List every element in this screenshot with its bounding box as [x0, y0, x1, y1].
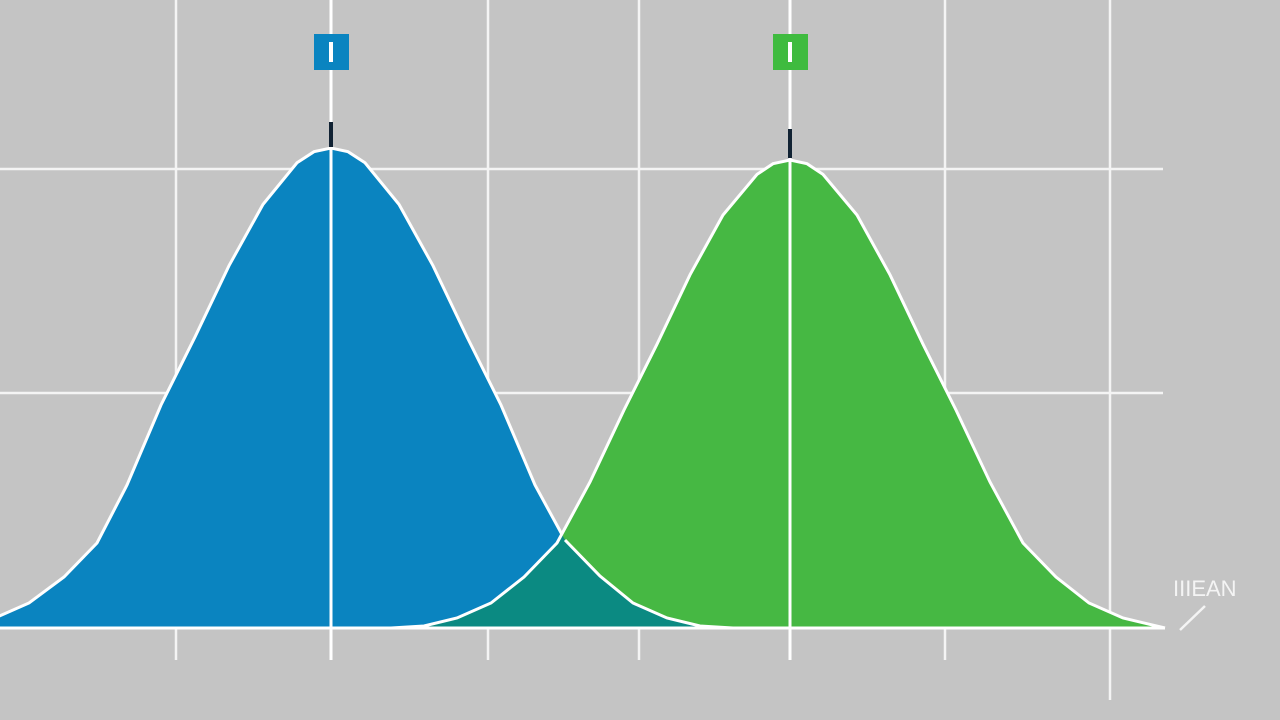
label marker: green [773, 34, 808, 70]
green distribution curve [391, 160, 1165, 628]
mean label: IIIEAN [1173, 576, 1237, 601]
blue distribution curve [0, 148, 733, 628]
mean lines [331, 0, 790, 660]
baseline [0, 626, 1165, 630]
mean label [1173, 576, 1237, 630]
label marker: blue [314, 34, 349, 70]
overlap region [428, 536, 696, 626]
peak ticks [331, 122, 790, 158]
